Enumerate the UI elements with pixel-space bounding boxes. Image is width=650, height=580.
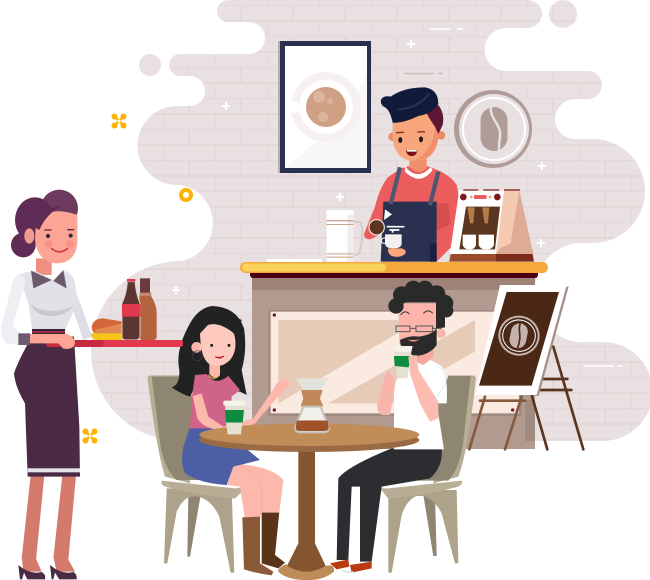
barista right arm: [437, 203, 452, 243]
man brows: [401, 311, 433, 315]
decorations: white plus marks and dashes: [172, 29, 623, 366]
man beard: [400, 328, 437, 356]
waitress ankles: [22, 557, 75, 572]
icon: yellow cross marks and ring: [82, 114, 191, 444]
table: [199, 423, 419, 580]
waitress cheeks: [44, 240, 52, 248]
barista eyes and brows: [398, 137, 402, 143]
woman cup: [225, 405, 244, 434]
bottle: brown: [139, 293, 157, 340]
barista: [320, 87, 534, 262]
coffee cup in hand: [385, 234, 402, 248]
left chair: [147, 375, 247, 573]
easel sign: [469, 285, 583, 449]
waitress legs: [22, 475, 76, 560]
waitress eyes and brows: [46, 234, 50, 238]
woman neck: [209, 363, 220, 378]
woman necklace: [208, 375, 219, 378]
barista hair: [381, 87, 438, 123]
woman: [172, 306, 289, 575]
man face: [398, 303, 437, 355]
sign bean logo: [495, 312, 543, 360]
coffee machine: [449, 189, 534, 262]
right chair: [380, 375, 476, 573]
barista hand: [388, 248, 406, 257]
waitress skirt stripe: [28, 468, 80, 472]
man ear: [436, 329, 446, 338]
counter top: [250, 270, 538, 278]
man sleeve: [433, 365, 446, 402]
waitress face: [35, 211, 77, 263]
bottle: cola: [122, 282, 140, 340]
counter: [240, 259, 548, 449]
barista sweater: [383, 166, 459, 262]
waitress skirt: [14, 334, 80, 477]
man: [330, 281, 453, 573]
sign board: [533, 287, 569, 396]
man glasses: [396, 326, 442, 332]
milk jug and pouring cup: [369, 220, 384, 235]
barista left arm: [364, 178, 390, 239]
barista apron: [381, 202, 437, 262]
table foot: [278, 564, 334, 580]
tray: [46, 340, 183, 347]
woman boots: [262, 512, 285, 568]
waitress forearm and hand: [30, 334, 75, 349]
man back arm: [377, 370, 395, 415]
counter body: [252, 278, 535, 449]
man front arm: [408, 355, 438, 422]
waitress hair strand: [33, 206, 62, 230]
table top: [199, 428, 419, 452]
waitress shoes: [18, 565, 77, 579]
food: chicken on plate: [92, 318, 123, 333]
waitress: [1, 190, 183, 579]
easel back legs: [532, 347, 583, 449]
wall emblem: coffee bean clock: [454, 90, 532, 168]
woman legs: [227, 463, 283, 517]
waitress collar: [31, 270, 67, 288]
wall poster: coffee cup: [278, 41, 371, 173]
woman arm: [193, 377, 289, 430]
man neck: [412, 350, 433, 365]
waitress right sleeve: [68, 280, 92, 340]
woman skirt: [182, 427, 260, 485]
table pole: [298, 450, 315, 547]
counter panel: [268, 310, 522, 416]
waitress blouse: [18, 271, 77, 330]
barista apron straps: [391, 167, 438, 205]
waitress cuff: [18, 333, 30, 345]
waitress left sleeve: [1, 274, 25, 345]
waitress smile: [52, 249, 67, 252]
chemex coffee maker: [295, 378, 329, 432]
white jug: [320, 216, 328, 237]
woman hair: [172, 306, 247, 397]
woman cup on table: [226, 423, 242, 434]
waitress ear: [24, 228, 34, 244]
barista smile: [406, 150, 417, 156]
barista back hair: [427, 105, 443, 134]
waitress neck: [36, 258, 52, 275]
man curly hair: [388, 281, 453, 329]
man shoes: [330, 559, 349, 569]
man cup: [394, 350, 412, 378]
barista neck and collar: [405, 166, 433, 179]
man shirt: [394, 358, 447, 449]
man trousers: [337, 448, 442, 562]
easel front legs: [469, 397, 525, 449]
woman face: [191, 342, 202, 353]
woman features: [210, 344, 213, 347]
woman top: [190, 374, 240, 428]
barista ears: [388, 132, 397, 141]
waitress hair: [41, 190, 78, 227]
background: brick wall blob: [91, 0, 650, 441]
seated customers and table: [147, 281, 476, 580]
barista head: [393, 108, 438, 161]
waitress belt: [32, 329, 65, 334]
